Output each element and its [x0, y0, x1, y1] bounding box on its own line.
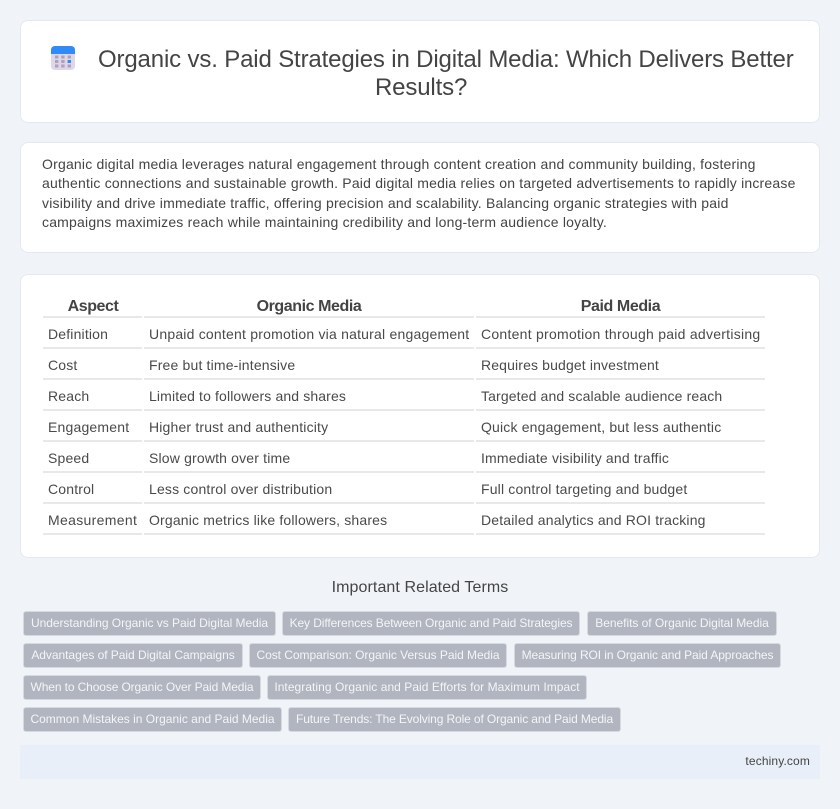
tag group: related terms: [23, 611, 781, 732]
table header: Organic Media: [257, 298, 361, 315]
tag: [23, 643, 243, 668]
tag: [23, 675, 261, 700]
panel: description: [20, 142, 820, 253]
title: Organic vs. Paid Strategies in Digital Media: Which Delivers Better: [98, 46, 794, 73]
description text: campaigns maximizes reach while maintaining credibility and long-term audience loyalty.: [42, 214, 607, 230]
tag: [267, 675, 587, 700]
panel: title header: [20, 20, 820, 123]
row: engagement: Higher trust and authenticity: [149, 419, 328, 435]
row: reach: Targeted and scalable audience reach: [481, 388, 722, 404]
table header: Aspect: [68, 298, 118, 315]
row: cost: Free but time-intensive: [149, 357, 295, 373]
description text: authentic connections and sustainable growth. Paid digital media relies on targeted advertisements to rapidly increase: [42, 175, 796, 191]
tag: [23, 611, 276, 636]
description text: [42, 156, 796, 230]
tag: [249, 643, 507, 668]
tag: Cost Comparison: Organic Versus Paid Media: [256, 648, 500, 662]
tag: Common Mistakes in Organic and Paid Media: [30, 712, 275, 726]
tag: [514, 643, 781, 668]
row: definition: Definition: [48, 326, 108, 342]
description text: Organic digital media leverages natural engagement through content creation and community building, fostering: [42, 156, 756, 172]
row: speed: Speed: [48, 450, 89, 466]
footer bar: [20, 745, 820, 779]
row: control: Control: [48, 481, 94, 497]
row: measurement: Detailed analytics and ROI tracking: [481, 512, 706, 528]
icon: calendar: [51, 46, 75, 70]
tag: When to Choose Organic Over Paid Media: [31, 680, 253, 694]
tag: [23, 707, 282, 732]
row: cost: [48, 357, 659, 373]
tag: [587, 611, 777, 636]
row: cost: Requires budget investment: [481, 357, 659, 373]
heading: related terms: Important Related Terms: [332, 579, 508, 596]
row: cost: Cost: [48, 357, 77, 373]
row: control: Less control over distribution: [149, 481, 332, 497]
row: definition: Unpaid content promotion via natural engagement: [149, 326, 469, 342]
tag: [282, 611, 580, 636]
tag: [288, 707, 621, 732]
row: measurement: Organic metrics like followers, shares: [149, 512, 387, 528]
table header: [68, 298, 661, 315]
row: definition: [48, 326, 760, 342]
title second line: Results?: [375, 74, 467, 101]
footer credit: techiny.com: [745, 754, 810, 768]
row: measurement: Measurement: [48, 512, 137, 528]
row: reach: Limited to followers and shares: [149, 388, 346, 404]
tag: Integrating Organic and Paid Efforts for Maximum Impact: [274, 680, 580, 694]
row: reach: Reach: [48, 388, 89, 404]
description text: visibility and drive immediate traffic, offering precision and scalability. Balancing organic strategies with paid: [42, 195, 729, 211]
tag: Future Trends: The Evolving Role of Organic and Paid Media: [296, 712, 613, 726]
row: control: [48, 481, 688, 497]
row: engagement: [48, 419, 721, 435]
row: engagement: Quick engagement, but less authentic: [481, 419, 721, 435]
tag: Key Differences Between Organic and Paid Strategies: [290, 616, 572, 630]
row: speed: Immediate visibility and traffic: [481, 450, 669, 466]
tag: Benefits of Organic Digital Media: [595, 616, 769, 630]
row: control: Full control targeting and budget: [481, 481, 687, 497]
tag: Measuring ROI in Organic and Paid Approaches: [522, 648, 773, 662]
row: measurement: [48, 512, 706, 528]
row: speed: Slow growth over time: [149, 450, 290, 466]
tag: Advantages of Paid Digital Campaigns: [31, 648, 235, 662]
row: definition: Content promotion through paid advertising: [481, 326, 760, 342]
table header: Paid Media: [581, 298, 660, 315]
row: speed: [48, 450, 669, 466]
row: reach: [48, 388, 722, 404]
tag: Understanding Organic vs Paid Digital Media: [31, 616, 268, 630]
row: engagement: Engagement: [48, 419, 129, 435]
panel: comparison table: [20, 274, 820, 558]
